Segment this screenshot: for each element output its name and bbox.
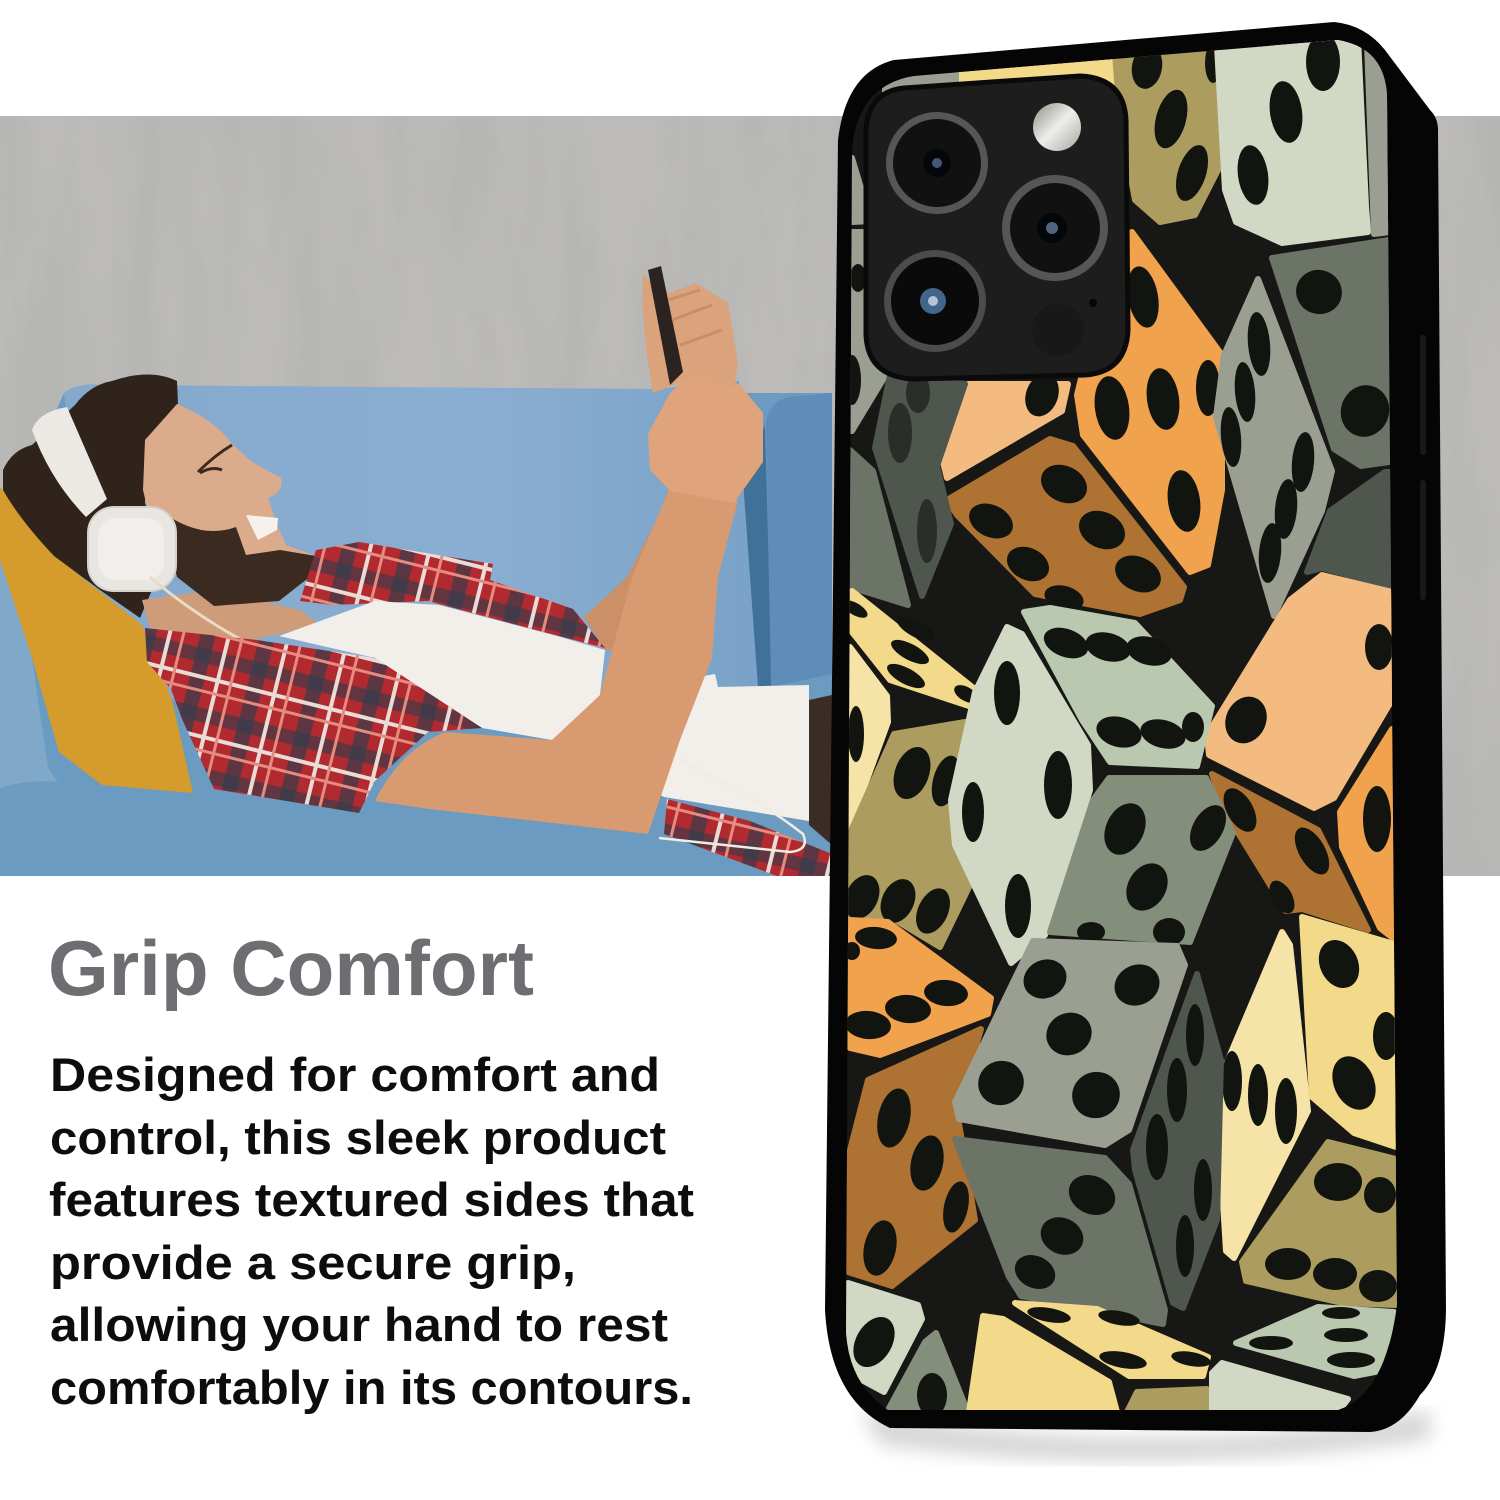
die: white-green centre [951, 608, 1233, 963]
plaid shirt hem [664, 799, 832, 876]
held phone [648, 266, 683, 385]
phone case [825, 22, 1446, 1432]
body text: allowing your hand to rest [50, 1298, 668, 1351]
camera module [866, 76, 1128, 379]
fingers [668, 290, 722, 345]
phone case shadow [860, 1410, 1430, 1461]
die: top left slivers [850, 58, 1112, 431]
lower hand [648, 368, 763, 503]
die: orange centre [943, 232, 1222, 615]
upper hand [642, 274, 738, 393]
photo scene [0, 266, 832, 876]
yellow pillow [0, 487, 193, 793]
die: large grey [955, 941, 1221, 1324]
headphones [32, 407, 176, 591]
lens: upper left [886, 112, 988, 214]
case body [825, 22, 1446, 1432]
cable over shirt [659, 760, 805, 852]
die: yellow right [1216, 917, 1399, 1305]
printed dice artwork [838, 30, 1400, 1420]
side grip buttons [1420, 335, 1426, 600]
die: yellow left [838, 591, 981, 947]
body text: control, this sleek product [50, 1111, 666, 1164]
white t-shirt [279, 601, 809, 821]
die: white top [1217, 33, 1390, 243]
die: grey right [1216, 240, 1396, 616]
neck [142, 592, 316, 640]
flash [1033, 103, 1081, 151]
sofa [0, 381, 832, 876]
plaid shirt collar side [300, 542, 605, 648]
microphone and sensor [1032, 299, 1097, 356]
body text [49, 1048, 694, 1414]
body text: provide a secure grip, [50, 1236, 576, 1289]
body text: comfortably in its contours. [50, 1361, 693, 1414]
jeans and belt [809, 695, 832, 845]
concrete wall background [0, 116, 1500, 876]
heading: Grip Comfort [48, 924, 534, 1012]
die: dark left [843, 264, 965, 605]
smile [246, 515, 278, 540]
lens: right [1002, 175, 1108, 281]
hair back [3, 374, 178, 618]
die: orange bottom left [844, 920, 991, 1286]
forearm [375, 487, 738, 834]
dice: bottom row [845, 1283, 1394, 1417]
lens: lower left [884, 250, 986, 352]
lifestyle photo: man on sofa [0, 116, 1500, 876]
body text: features textured sides that [49, 1173, 694, 1226]
back arm [584, 523, 655, 650]
plaid shirt sleeve [145, 628, 482, 813]
body text: Designed for comfort and [50, 1048, 660, 1101]
eye and brow [198, 445, 232, 473]
earphone cable [149, 576, 242, 638]
die: peach right [1207, 575, 1394, 939]
die: olive top [1115, 43, 1221, 222]
beard [173, 519, 314, 606]
face [143, 404, 314, 556]
